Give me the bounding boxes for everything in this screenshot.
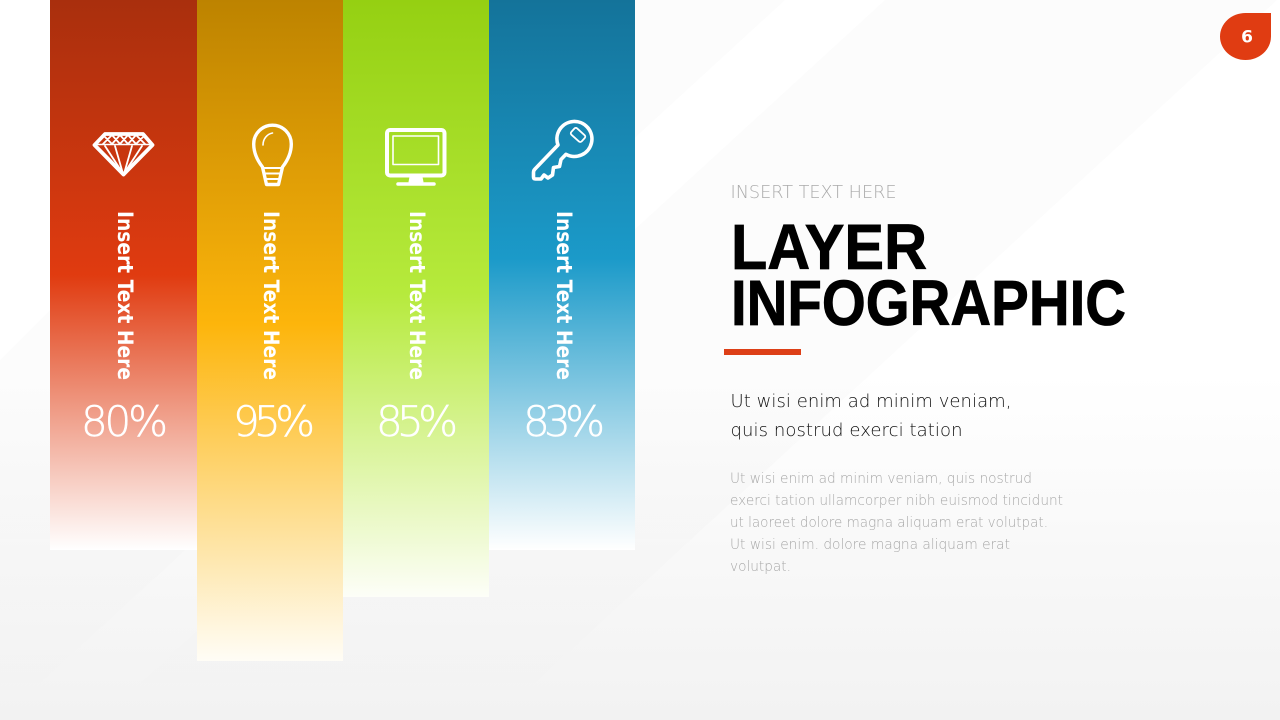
page number badge — [1220, 13, 1271, 60]
title: INFOGRAPHIC — [731, 267, 1126, 339]
label: Insert Text Here — [258, 211, 283, 380]
eyebrow text: INSERT TEXT HERE — [730, 182, 896, 203]
page number badge: 6 — [1241, 28, 1253, 48]
label: Insert Text Here — [551, 211, 576, 380]
percentage: 85% — [376, 397, 458, 446]
accent bar — [724, 349, 801, 355]
percentage: 80% — [81, 397, 168, 446]
label: Insert Text Here — [404, 211, 429, 380]
panel: red layer 80% — [50, 0, 197, 550]
body text: ut laoreet dolore magna aliquam erat volutpat. — [730, 515, 1048, 531]
body text: exerci tation ullamcorper nibh euismod tincidunt — [730, 493, 1063, 509]
icon: key — [534, 121, 592, 179]
panel: yellow layer 95% — [197, 0, 343, 661]
yellow column — [197, 0, 343, 661]
percentage: 95% — [233, 397, 315, 446]
icon: diamond — [94, 134, 152, 174]
subtitle: Ut wisi enim ad minim veniam, — [730, 391, 1012, 412]
label: Insert Text Here — [112, 211, 137, 380]
green column — [343, 0, 489, 597]
blue column — [489, 0, 635, 550]
subtitle: quis nostrud exerci tation — [730, 420, 962, 441]
body text: Ut wisi enim. dolore magna aliquam erat — [730, 537, 1010, 553]
body text: Ut wisi enim ad minim veniam, quis nostrud — [730, 471, 1032, 487]
body text: volutpat. — [730, 559, 791, 575]
icon: light bulb — [254, 125, 291, 184]
panel: blue layer 83% — [489, 0, 635, 550]
title — [731, 211, 1126, 339]
panel: green layer 85% — [343, 0, 489, 597]
body text — [730, 471, 1063, 575]
percentage: 83% — [523, 397, 605, 446]
subtitle — [730, 391, 1012, 441]
red column — [50, 0, 197, 550]
title: LAYER — [731, 211, 927, 283]
icon: monitor — [387, 130, 444, 184]
